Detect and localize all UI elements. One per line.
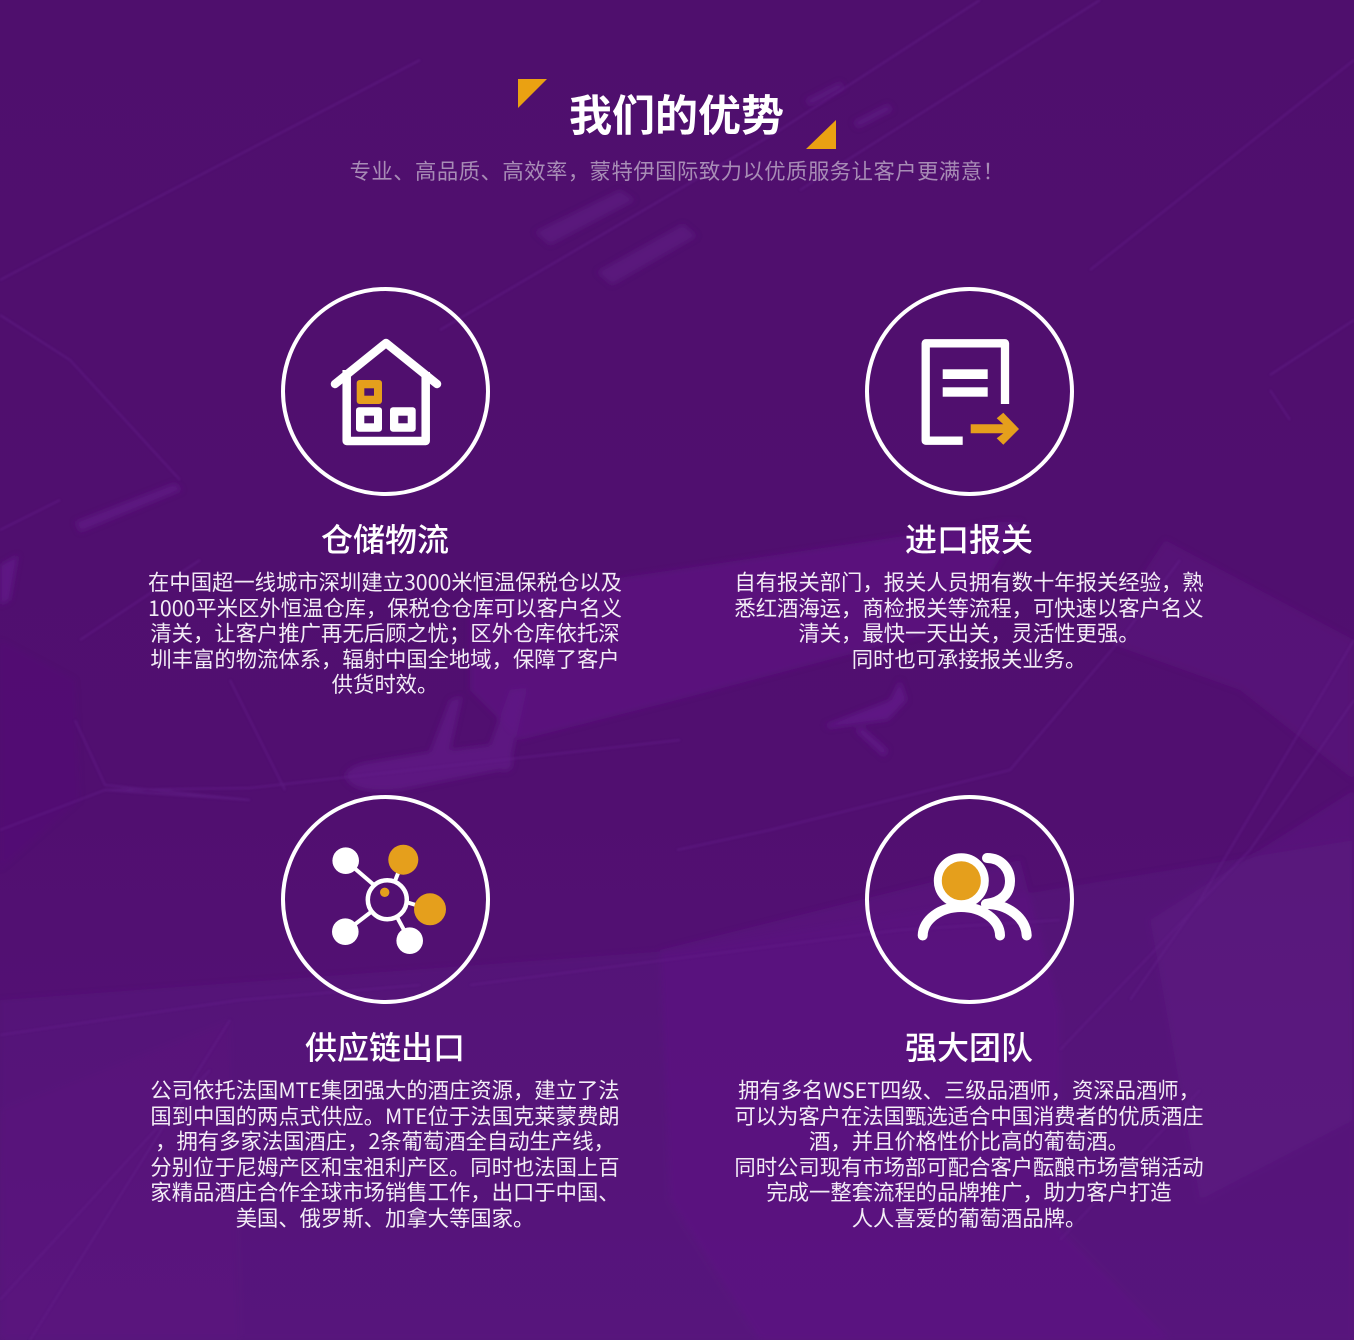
description: 完成一整套流程的品牌推广，助力客户打造 bbox=[766, 1176, 1172, 1207]
description: 悉红酒海运，商检报关等流程，可快速以客户名义 bbox=[734, 592, 1204, 623]
heading: 进口报关 bbox=[905, 515, 1033, 561]
description bbox=[150, 1074, 620, 1233]
description: 人人喜爱的葡萄酒品牌。 bbox=[852, 1202, 1086, 1233]
heading: 强大团队 bbox=[905, 1023, 1033, 1069]
description: 清关，最快一天出关，灵活性更强。 bbox=[798, 617, 1140, 648]
description: 1000平米区外恒温仓库，保税仓仓库可以客户名义 bbox=[148, 592, 622, 623]
panel: import customs bbox=[734, 287, 1204, 674]
panel: strong team bbox=[734, 795, 1204, 1233]
icon: network nodes bbox=[281, 795, 490, 1004]
description bbox=[734, 566, 1204, 674]
description: 供货时效。 bbox=[332, 668, 438, 699]
panel: warehousing logistics bbox=[148, 287, 622, 699]
description: 可以为客户在法国甄选适合中国消费者的优质酒庄 bbox=[734, 1100, 1204, 1131]
description: 公司依托法国MTE集团强大的酒庄资源，建立了法 bbox=[150, 1074, 620, 1105]
description: 家精品酒庄合作全球市场销售工作，出口于中国、 bbox=[150, 1176, 620, 1207]
description: 圳丰富的物流体系，辐射中国全地域，保障了客户 bbox=[150, 643, 620, 674]
description: 同时公司现有市场部可配合客户酝酿市场营销活动 bbox=[734, 1151, 1204, 1182]
heading: 我们的优势 bbox=[569, 82, 784, 144]
title block bbox=[350, 79, 1004, 186]
description bbox=[734, 1074, 1204, 1233]
plane silhouettes bbox=[345, 688, 527, 791]
subtitle: 专业、高品质、高效率，蒙特伊国际致力以优质服务让客户更满意！ bbox=[350, 155, 1004, 186]
icon: team people bbox=[865, 795, 1074, 1004]
description: 国到中国的两点式供应。MTE位于法国克莱蒙费朗 bbox=[150, 1100, 620, 1131]
description bbox=[148, 566, 622, 699]
description: 拥有多名WSET四级、三级品酒师，资深品酒师， bbox=[738, 1074, 1200, 1105]
description: 自有报关部门，报关人员拥有数十年报关经验，熟 bbox=[734, 566, 1204, 597]
description: 清关，让客户推广再无后顾之忧；区外仓库依托深 bbox=[150, 617, 620, 648]
corner triangle: top left bbox=[518, 79, 547, 108]
description: 酒，并且价格性价比高的葡萄酒。 bbox=[809, 1125, 1129, 1156]
description: ，拥有多家法国酒庄，2条葡萄酒全自动生产线， bbox=[155, 1125, 615, 1156]
description: 分别位于尼姆产区和宝祖利产区。同时也法国上百 bbox=[150, 1151, 620, 1182]
icon: document with arrow bbox=[865, 287, 1074, 496]
description: 在中国超一线城市深圳建立3000米恒温保税仓以及 bbox=[148, 566, 622, 597]
heading: 供应链出口 bbox=[305, 1023, 465, 1069]
heading: 仓储物流 bbox=[321, 515, 449, 561]
corner triangle: bottom right bbox=[806, 120, 836, 149]
description: 同时也可承接报关业务。 bbox=[852, 643, 1086, 674]
icon: warehouse bbox=[281, 287, 490, 496]
description: 美国、俄罗斯、加拿大等国家。 bbox=[236, 1202, 534, 1233]
panel: supply chain export bbox=[150, 795, 620, 1233]
